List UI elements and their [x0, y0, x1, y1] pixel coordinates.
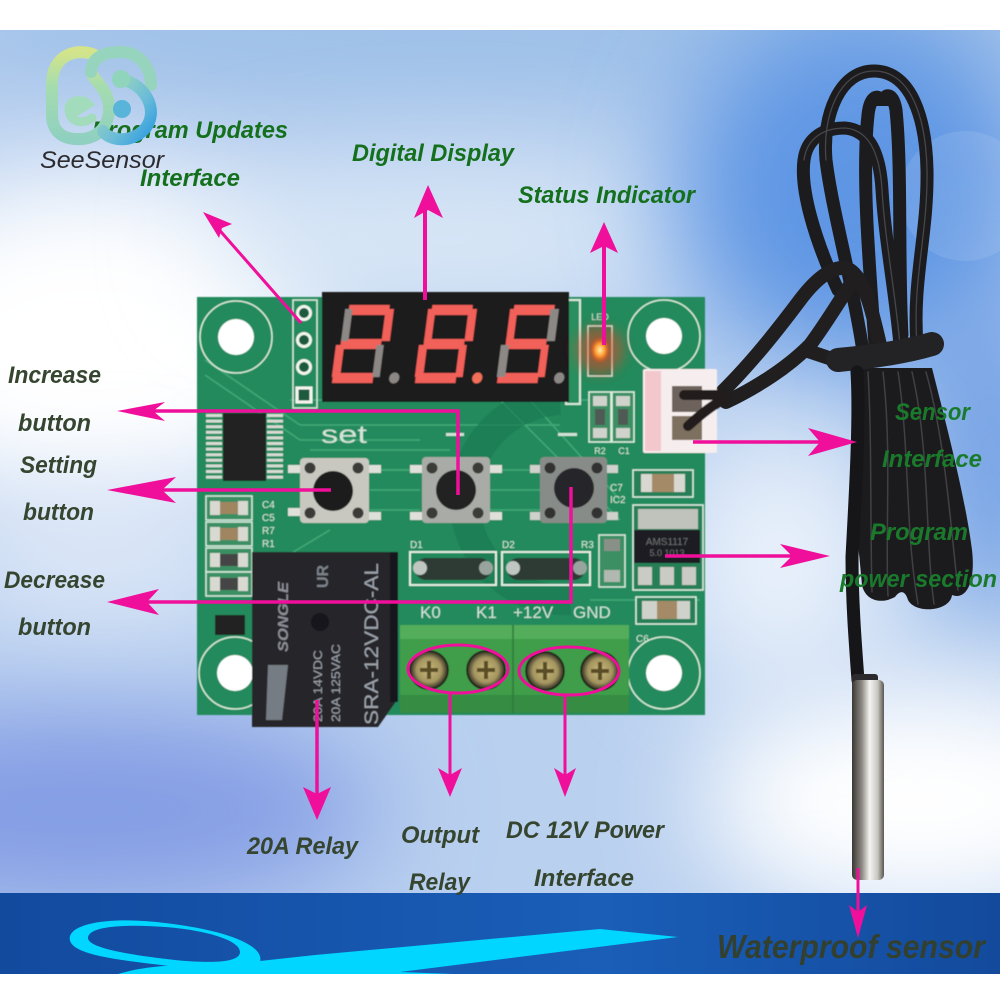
knot band	[838, 344, 932, 360]
label: decrease button: Decrease	[4, 567, 105, 594]
label: program updates interface: Program Updates	[92, 117, 288, 144]
label: 20A relay: 20A Relay	[246, 833, 360, 860]
label: increase button: Increase	[8, 362, 101, 389]
sensor connector	[643, 369, 726, 453]
label: decrease button: button	[18, 614, 91, 641]
scissors graphic	[70, 920, 678, 975]
voltage regulator: 5.0 1013	[649, 548, 685, 558]
small transistor	[215, 615, 245, 635]
label: program updates interface	[92, 117, 288, 192]
left SMD components	[206, 496, 275, 596]
arrow: 20A relay	[303, 700, 331, 820]
faint watermark circle	[465, 400, 570, 600]
diodes D1 and D2	[410, 540, 590, 585]
arrow: status indicator	[590, 222, 618, 345]
circuit board	[197, 292, 726, 727]
SMD components right of display: C1	[618, 446, 630, 456]
bottom blue band	[0, 893, 1000, 975]
arrow: decrease button	[107, 487, 571, 615]
arrow: output relay	[408, 645, 508, 797]
PCB base	[197, 297, 705, 715]
digit 5	[496, 305, 574, 384]
relay: SONGLE	[275, 581, 292, 652]
label: program power section: power section	[839, 566, 997, 593]
label: digital display: Digital Display	[352, 140, 516, 167]
terminal labels: GND	[573, 603, 611, 622]
relay: SRA-12VDC-AL	[362, 563, 383, 725]
label: sensor interface: Sensor	[895, 399, 972, 426]
right capacitors: C6	[636, 634, 649, 645]
waterproof temperature probe	[852, 674, 884, 880]
status LED	[576, 312, 624, 376]
board legend: set: set	[321, 421, 367, 449]
label: program updates interface: Interface	[140, 165, 240, 192]
label: program power section: Program	[870, 519, 968, 546]
green screw terminal block	[400, 625, 629, 713]
arrow: digital display	[414, 185, 443, 300]
cable run to connector	[716, 268, 880, 402]
terminal labels	[420, 603, 611, 622]
label: setting button: Setting	[20, 452, 97, 479]
diodes D1 and D2: D1	[410, 540, 423, 551]
label: setting button: button	[23, 499, 94, 526]
relay: 20A 125VAC	[329, 644, 343, 722]
terminal labels: K1	[476, 603, 497, 622]
top loops	[803, 71, 927, 345]
setting push button	[288, 458, 381, 523]
probe cable	[852, 372, 858, 680]
right capacitors: IC2	[610, 495, 626, 506]
digit 8	[414, 305, 492, 384]
label: increase button: button	[18, 410, 91, 437]
increase push button	[410, 457, 502, 523]
label: decrease button	[4, 567, 105, 641]
label: output relay: Relay	[409, 869, 472, 896]
label: DC 12V power interface: Interface	[534, 865, 634, 892]
resistor R3	[581, 535, 625, 587]
label: increase button	[8, 362, 101, 437]
left SMD components: C5	[262, 513, 275, 524]
arrow: setting button	[107, 477, 331, 503]
right capacitors	[610, 470, 696, 645]
right capacitors: C7	[610, 483, 623, 494]
logo wordmark: SeeSensor	[40, 147, 165, 174]
SMD components right of display	[589, 392, 634, 456]
voltage regulator	[633, 505, 703, 590]
left SMD components: C4	[262, 500, 275, 511]
label: DC 12V power interface	[506, 817, 666, 892]
relay: UR	[315, 564, 332, 588]
logo mark	[52, 52, 151, 139]
program header pads	[293, 300, 317, 408]
voltage regulator: AMS1117	[646, 537, 689, 548]
arrow: DC 12V power interface	[519, 647, 619, 797]
label: setting button	[20, 452, 97, 526]
resistor R3: R3	[581, 540, 594, 551]
connector wires	[684, 395, 726, 426]
arrow: waterproof sensor	[849, 868, 867, 938]
left SMD components: R1	[262, 539, 275, 550]
label: sensor interface	[882, 399, 982, 473]
label: output relay	[401, 822, 480, 896]
SeeSensor logo	[40, 52, 165, 174]
arrow: increase button	[117, 402, 458, 495]
arrow: program updates interface	[203, 212, 301, 323]
label: sensor interface: Interface	[882, 446, 982, 473]
main IC	[214, 413, 275, 481]
arrow: sensor interface	[693, 428, 857, 456]
terminal labels: +12V	[513, 603, 554, 622]
sensor cable bundle	[716, 71, 973, 680]
digit 2	[331, 305, 409, 384]
mounting holes	[199, 300, 700, 709]
plus and minus marks	[446, 433, 577, 436]
label: status indicator: Status Indicator	[518, 182, 697, 209]
relay	[252, 552, 398, 727]
arrow: program power section	[665, 544, 830, 568]
left SMD components: R7	[262, 526, 275, 537]
status LED: LED	[591, 312, 609, 322]
label: output relay: Output	[401, 822, 480, 849]
SMD components right of display: R2	[594, 446, 606, 456]
terminal labels: K0	[420, 603, 441, 622]
label: program power section	[839, 519, 997, 593]
relay: 20A 14VDC	[311, 650, 325, 722]
decrease push button	[530, 457, 618, 523]
digital display	[322, 292, 580, 404]
hanging cable bundle	[852, 368, 973, 609]
PCB traces	[205, 360, 700, 600]
diodes D1 and D2: D2	[502, 540, 515, 551]
label: DC 12V power interface: DC 12V Power	[506, 817, 666, 844]
